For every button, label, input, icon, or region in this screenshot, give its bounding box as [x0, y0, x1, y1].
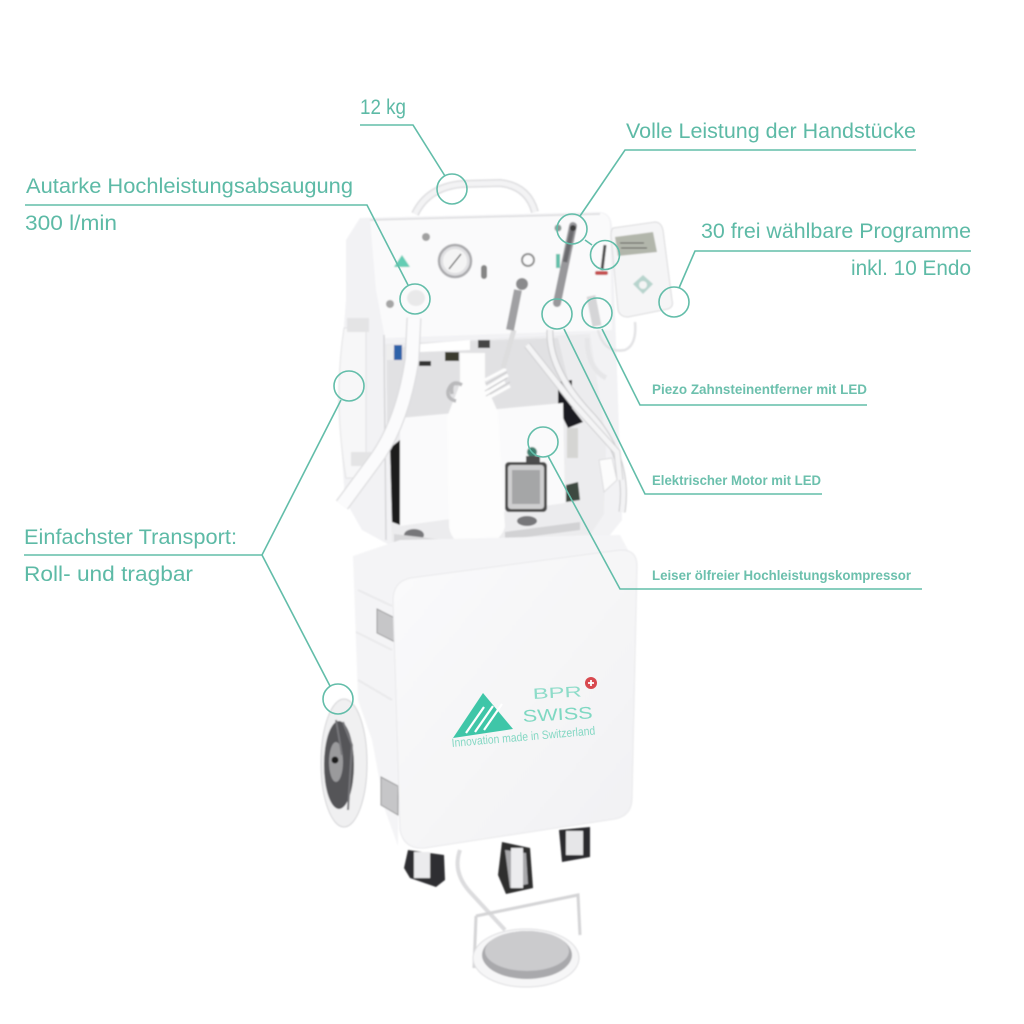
callout: Einfachster Transport: Roll- und tragbar: [24, 563, 193, 586]
latches: [377, 609, 398, 815]
caster wheels: [404, 827, 590, 894]
callout: 30 frei wählbare Programme: inkl. 10 Endo: [851, 257, 971, 280]
trolley side: [353, 535, 636, 846]
small triangle logo: [394, 255, 410, 267]
hoses: [342, 318, 414, 505]
product illustration: mobile dental unit: [321, 183, 672, 987]
brand logo: BPR Swiss: SWISS: [522, 703, 593, 726]
pressure gauge: [439, 245, 471, 277]
brand logo: BPR Swiss: [451, 677, 597, 750]
callout: Piezo Zahnsteinentferner: [582, 298, 867, 405]
callout: Autarke Hochleistungsabsaugung: [25, 175, 430, 314]
callout: 12 kg: 12 kg: [360, 96, 406, 119]
callout: Autarke Hochleistungsabsaugung: Autarke Hochleistungsabsaugung: [26, 175, 353, 198]
brand logo: BPR Swiss: Innovation made in Switzerland: [451, 723, 596, 750]
brand logo: BPR Swiss: BPR: [532, 683, 582, 703]
callout: Elektrischer Motor: Elektrischer Motor mit LED: [652, 473, 821, 488]
interior compartment: [385, 334, 606, 542]
callout: Piezo Zahnsteinentferner: Piezo Zahnsteinentferner mit LED: [652, 382, 867, 397]
white connector: [599, 458, 617, 492]
trolley front door: [393, 550, 637, 848]
callout: Autarke Hochleistungsabsaugung: 300 l/min: [25, 212, 117, 235]
callout: Volle Leistung der Handstücke: Volle Leistung der Handstücke: [626, 120, 916, 143]
callout: Einfachster Transport: [24, 371, 364, 714]
foot pedal: [473, 895, 580, 987]
water tank: [400, 403, 565, 526]
callout: 12 kg: [360, 96, 467, 204]
callout: Leiser ölfreier Hochleistungskompressor: Leiser ölfreier Hochleistungskompressor: [652, 568, 912, 583]
coiled cables: [448, 383, 462, 401]
callout: 30 frei wählbare Programme: 30 frei wählbare Programme: [701, 220, 971, 243]
callout: Einfachster Transport: Einfachster Transport:: [24, 526, 237, 549]
callout: 30 frei wählbare Programme: [659, 220, 971, 317]
control panel display: [611, 222, 672, 317]
callout: Elektrischer Motor: [542, 299, 822, 494]
compressor outlet: [505, 462, 547, 512]
upper case shell: [338, 212, 635, 556]
bottle: [447, 353, 505, 547]
suction port: [407, 290, 425, 306]
callout: Volle Leistung der Handstücke: [557, 120, 916, 270]
rear wheel: [321, 699, 367, 827]
black components: [558, 380, 583, 428]
carrying handle: [415, 183, 535, 214]
handpieces: [557, 226, 573, 303]
bottom feet: [404, 529, 424, 541]
foot pedal cable: [458, 850, 505, 930]
callout: Leiser ölfreier Hochleistungskompressor: [528, 427, 922, 589]
